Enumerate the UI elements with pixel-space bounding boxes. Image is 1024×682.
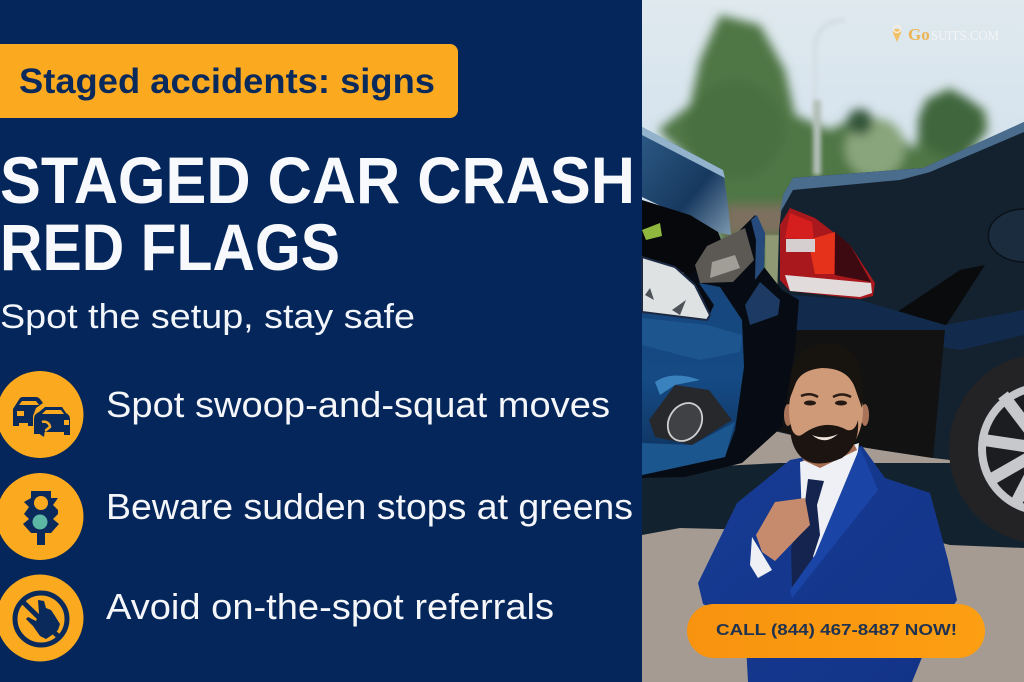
list item: referrals — [0, 574, 554, 662]
mouth — [812, 434, 838, 440]
logo: GoSuits.com: Go — [908, 25, 930, 44]
grille opening — [642, 200, 725, 275]
hood — [642, 127, 731, 235]
sleeve cuff — [750, 537, 772, 578]
list item: sudden stops — [0, 473, 633, 560]
sky — [642, 0, 1024, 300]
call to action button: CALL (844) 467-8487 NOW! — [716, 622, 957, 639]
icon: prohibited pointing hand — [0, 574, 84, 662]
icon: traffic light — [0, 473, 84, 560]
list item: swoop and squat — [0, 371, 610, 458]
front bumper — [642, 283, 744, 475]
hand — [756, 498, 810, 561]
front blue car — [642, 127, 799, 478]
beard — [790, 420, 858, 464]
exhaust surround — [649, 385, 732, 445]
icon: two cars swerving — [0, 371, 84, 458]
text: swoop and squat: Spot swoop-and-squat moves — [106, 384, 610, 425]
head — [789, 360, 863, 460]
title — [0, 143, 635, 284]
crumpled dark front mass — [642, 215, 799, 478]
hair — [790, 343, 863, 408]
logo: GoSuits.com: SUITS.COM — [931, 29, 1000, 44]
call to action button — [687, 604, 985, 658]
background trees — [658, 15, 988, 290]
neck — [800, 440, 857, 468]
rear wheel — [949, 354, 1024, 544]
rear black car — [770, 122, 1024, 460]
text: referrals: Avoid on-the-spot referrals — [106, 586, 554, 627]
brows and eyes — [801, 394, 851, 397]
title: RED FLAGS — [0, 210, 340, 284]
panel: navy text panel — [0, 0, 643, 682]
attorney portrait — [698, 343, 957, 682]
lapel — [790, 447, 878, 598]
panel: crash photo with attorney — [642, 0, 1024, 682]
shirt collar and shirt — [800, 443, 859, 560]
ears — [784, 404, 792, 426]
subtitle: Spot the setup, stay safe — [0, 298, 415, 336]
tail light — [780, 208, 875, 299]
road shadow — [642, 463, 1024, 548]
tag: staged accidents signs — [0, 44, 458, 118]
tag: staged accidents signs: Staged accidents: signs — [19, 62, 435, 101]
tie — [791, 479, 824, 588]
street lamp — [813, 20, 845, 175]
logo: GoSuits.com — [893, 25, 1000, 44]
headlight — [642, 257, 710, 320]
suit — [698, 446, 957, 682]
crumpled metal — [695, 228, 754, 283]
title: STAGED CAR CRASH — [0, 143, 635, 217]
ground — [642, 270, 1024, 682]
text: sudden stops: Beware sudden stops at greens — [106, 486, 633, 527]
